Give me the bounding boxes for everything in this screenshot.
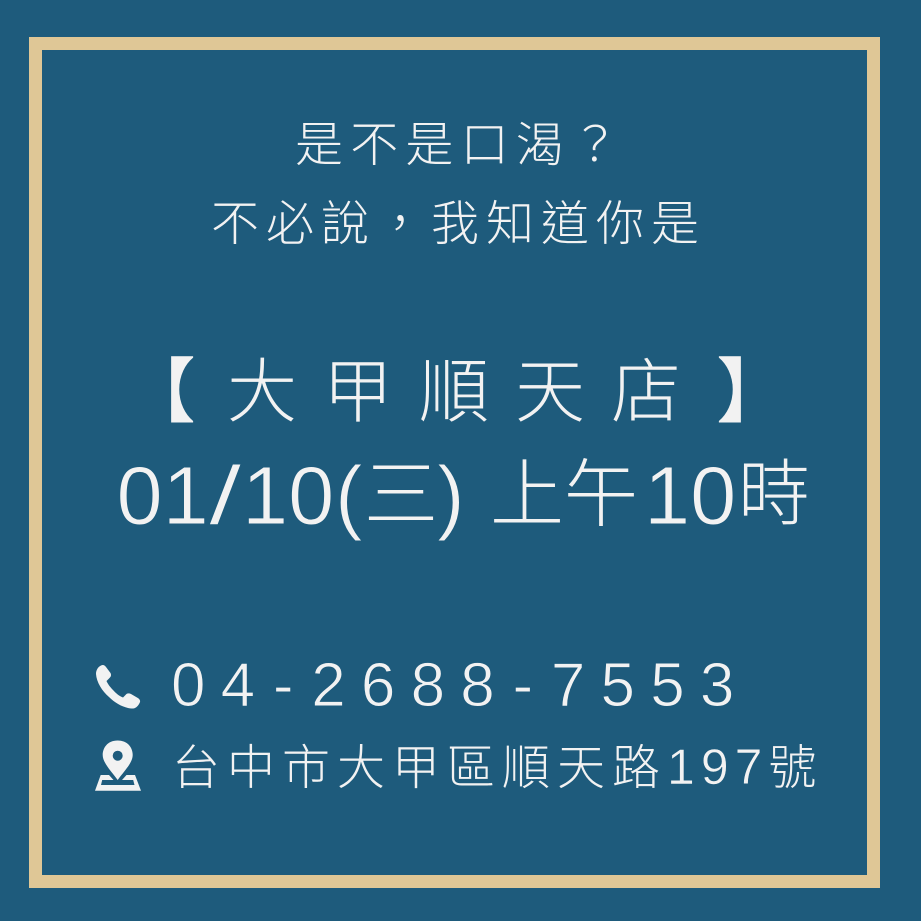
phone number: 04-2688-7553 [171, 651, 750, 720]
store name: 【 [125, 353, 195, 431]
store name: 】 [717, 353, 787, 431]
heading line 1: 是不是口渴？ [295, 119, 626, 172]
store name: 大甲順天店 [227, 353, 707, 431]
date and time: 上午 [490, 453, 638, 536]
date and time: 三 [364, 453, 438, 536]
heading line 2: 不必說，我知道你是 [211, 198, 706, 251]
date and time: ( [335, 449, 363, 542]
date and time: 時 [738, 455, 810, 535]
date and time: 10 [242, 449, 334, 542]
date and time: 01 [116, 449, 209, 542]
date and time: / [209, 449, 241, 542]
icon: phone [96, 665, 140, 708]
date and time: ) [437, 449, 465, 542]
icon: map pin [95, 740, 141, 791]
date and time [116, 449, 810, 542]
date and time: 10 [644, 449, 736, 542]
address: 台中市大甲區順天路197號 [172, 739, 823, 795]
